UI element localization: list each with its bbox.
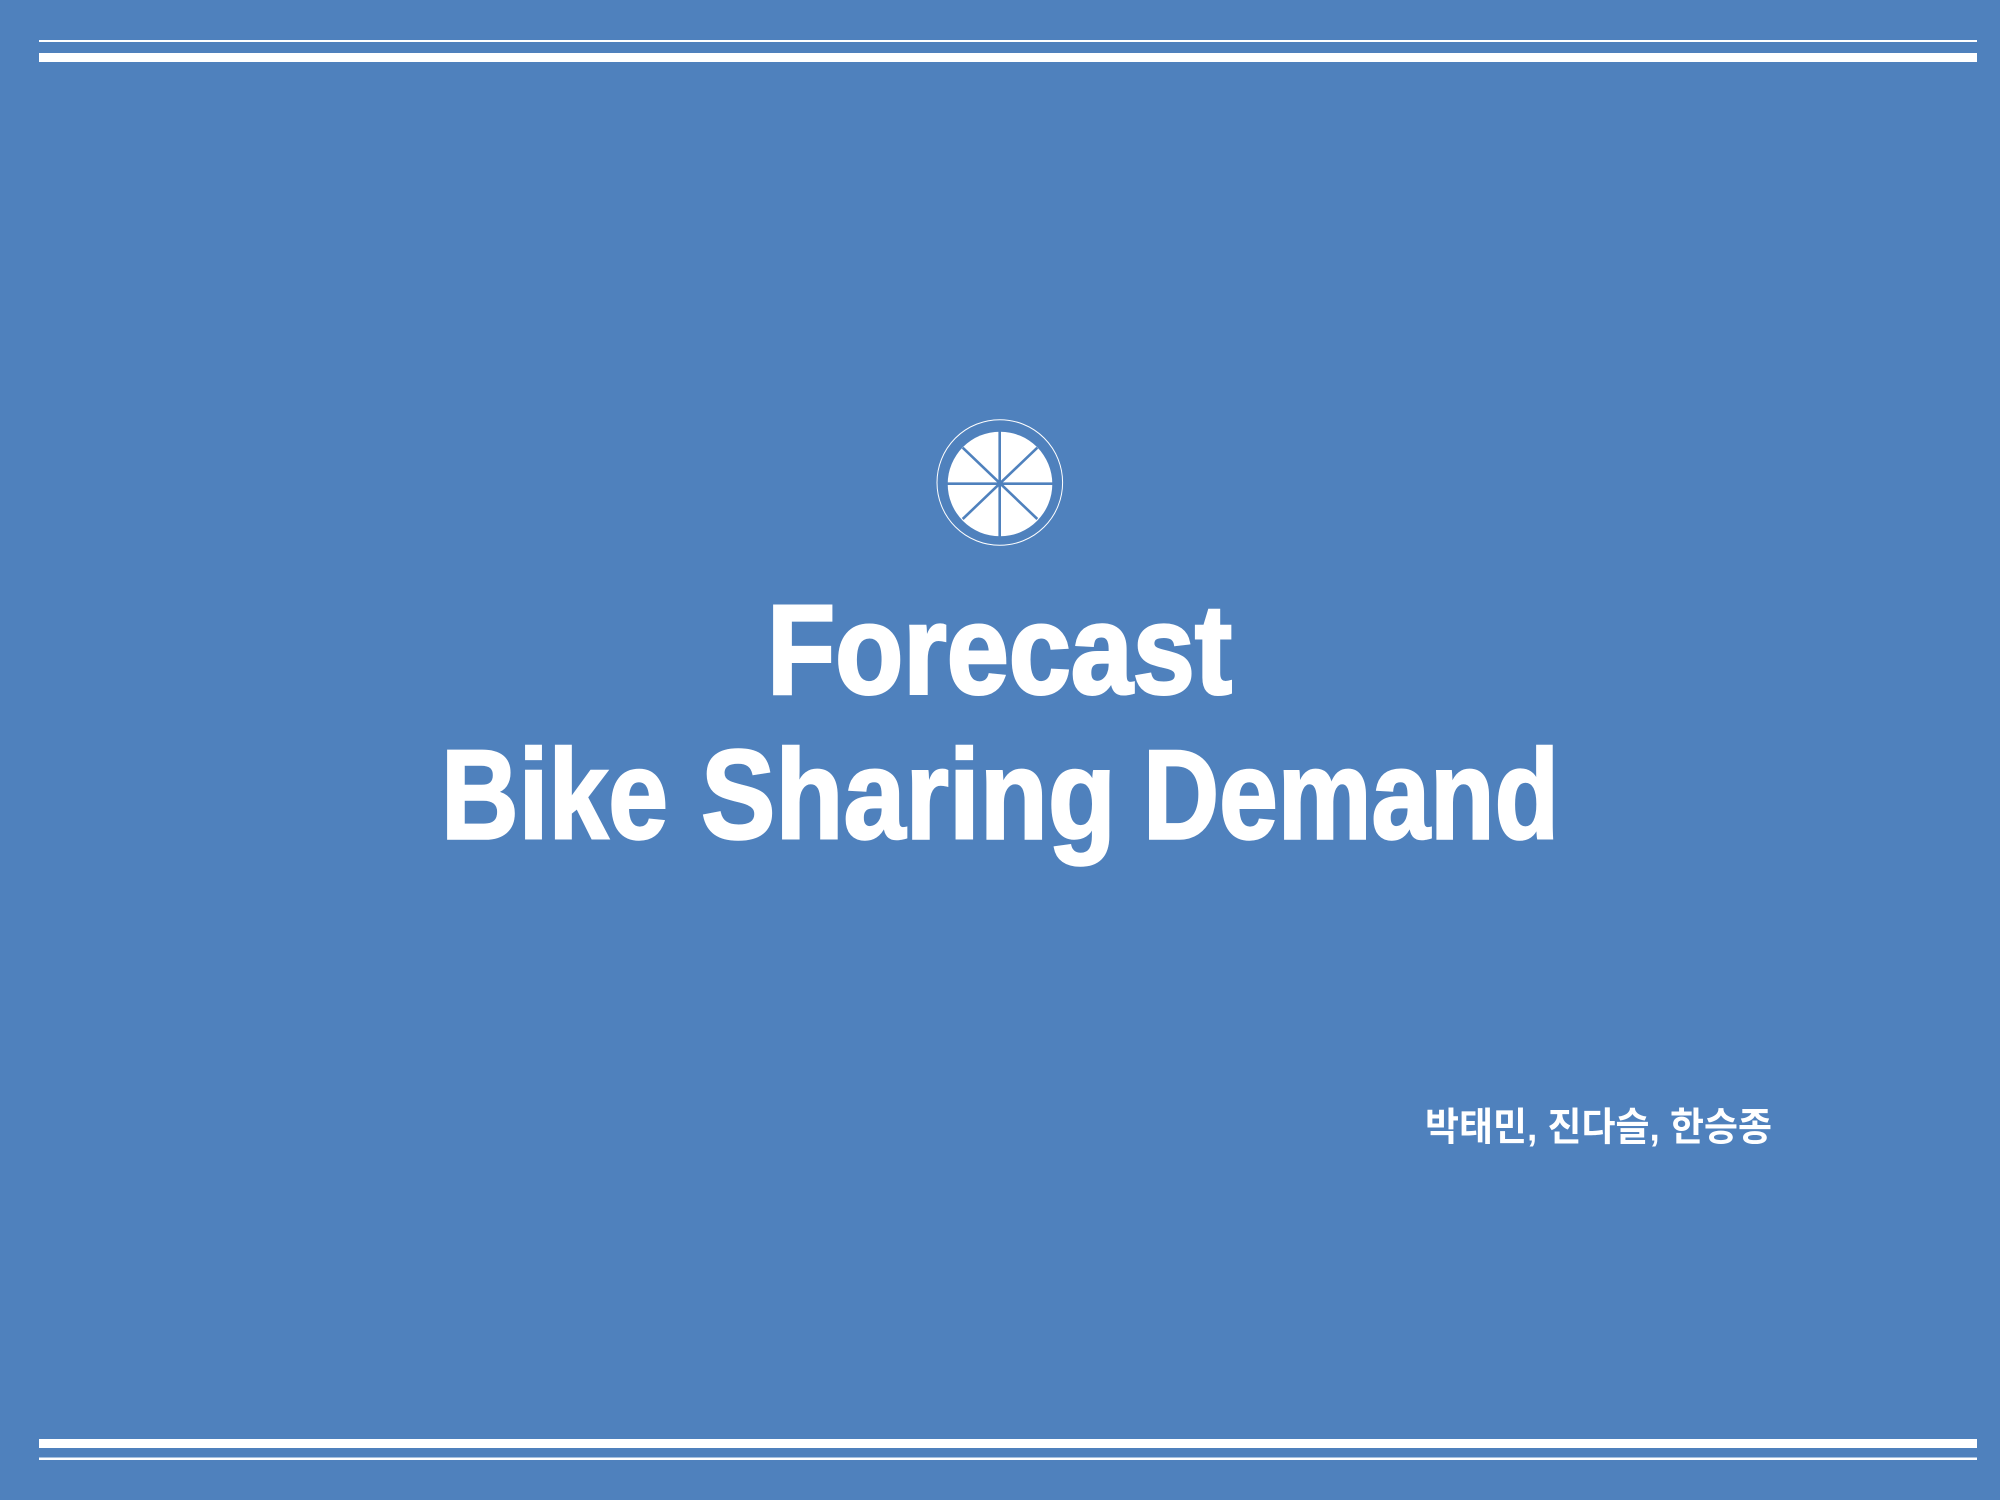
title line 1: Forecast (767, 578, 1232, 720)
title line 2: Sharing (701, 724, 1116, 866)
icon: bicycle wheel (937, 420, 1063, 545)
top double rule (39, 40, 1977, 62)
title line 2: Demand (1143, 724, 1559, 866)
authors: 박태민, 진다슬, 한승종 (1425, 1106, 1772, 1150)
bottom double rule (39, 1439, 1977, 1460)
title line 2: Bike (441, 724, 668, 866)
title line 2 (441, 724, 1559, 866)
title (441, 578, 1559, 866)
